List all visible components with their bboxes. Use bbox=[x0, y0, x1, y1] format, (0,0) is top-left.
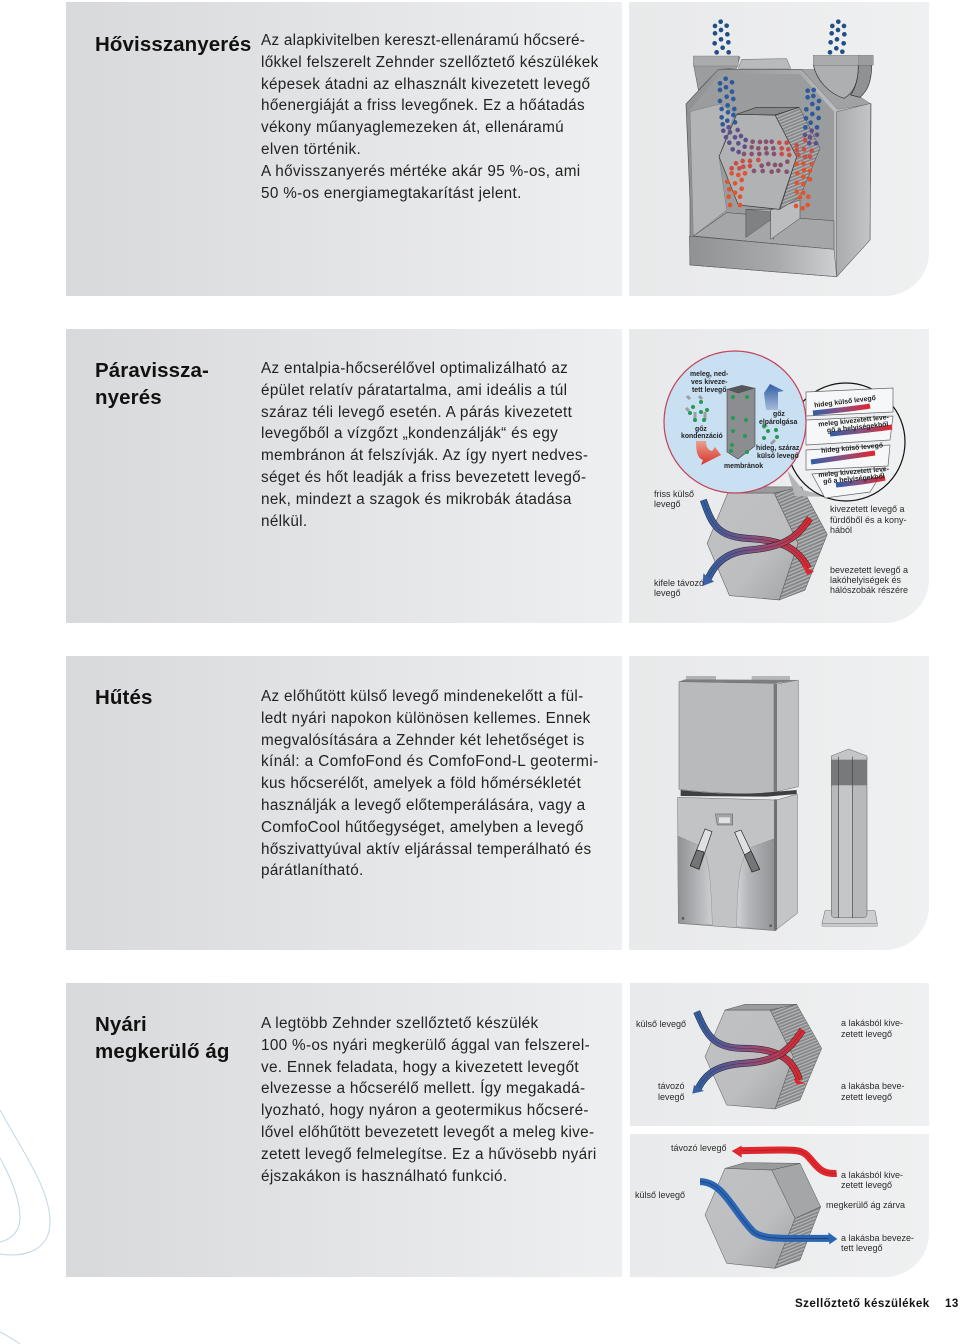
text block: hűtés leírása: ledt nyári napokon különösen kellemes. Ennek bbox=[261, 710, 591, 727]
heading: Páravisszanyerés: nyerés bbox=[95, 386, 162, 409]
magnifier: layers: gő a helyiségekből bbox=[823, 473, 885, 486]
footer: section title and page number: 13 bbox=[945, 1297, 959, 1310]
text block: hővisszanyerés leírása: hőenergiáját a friss levegőnek. Ez a hőátadás bbox=[261, 97, 585, 114]
labels: fürdőből és a kony- bbox=[830, 515, 907, 525]
magnifier: membrane circle bbox=[664, 351, 806, 493]
heading: Páravisszanyerés bbox=[95, 359, 209, 409]
illustration: ventilation unit and ground tube bbox=[677, 676, 878, 931]
text block: hővisszanyerés leírása: lőkkel felszerelt Zehnder szellőztető készülékek bbox=[261, 54, 599, 71]
labels: zetett levegő bbox=[841, 1180, 892, 1190]
magnifier: membrane circle: gőz bbox=[695, 426, 707, 433]
labels: a lakásból kive- bbox=[841, 1018, 903, 1028]
text block: hűtés leírása bbox=[261, 688, 599, 879]
text block: páravisszanyerés leírása: levegőből a vízgőzt „kondenzálják“ és egy bbox=[261, 425, 558, 442]
labels: a lakásba beveze- bbox=[841, 1233, 914, 1243]
text block: hővisszanyerés leírása: képesek átadni az elhasznált kivezetett levegő bbox=[261, 76, 590, 93]
magnifier: layers: hideg külső levegő bbox=[814, 395, 876, 409]
labels: kifele távozó bbox=[654, 578, 704, 588]
magnifier: membrane circle: elpárolgása bbox=[759, 419, 797, 426]
text block: páravisszanyerés leírása: Az entalpia-hőcserélővel optimalizálható az bbox=[261, 360, 568, 377]
labels: levegő bbox=[654, 499, 681, 509]
magnifier: layers: hideg külső levegő bbox=[821, 442, 883, 455]
panel: Nyári megkerülő ág bbox=[66, 983, 929, 1277]
magnifier: membrane circle: gőz bbox=[773, 411, 785, 418]
text block: hűtés leírása: ComfoCool hűtőegységet, amelyben a levegő bbox=[261, 819, 584, 836]
labels: kivezetett levegő a bbox=[830, 504, 905, 514]
right bottom background bbox=[630, 1134, 929, 1277]
heading: Páravisszanyerés: Páravissza- bbox=[95, 359, 209, 382]
exchanger hexagon bbox=[707, 487, 827, 600]
text block: nyári megkerülő leírása bbox=[261, 1015, 597, 1185]
heading: Hővisszanyerés: Hővisszanyerés bbox=[95, 33, 251, 56]
air dots: cold inner bbox=[720, 79, 819, 127]
labels: távozó bbox=[658, 1081, 685, 1091]
labels bbox=[654, 489, 908, 598]
magnifier: membrane circle: külső levegő bbox=[757, 453, 799, 460]
text block: hővisszanyerés leírása: A hővisszanyerés mértéke akár 95 %-os, ami bbox=[261, 163, 581, 180]
magnifier: layers bbox=[787, 383, 905, 501]
text block: hűtés leírása: párátlanítható. bbox=[261, 862, 364, 879]
magnifier: membrane circle: tett levegő bbox=[692, 387, 726, 394]
labels: lakóhelyiségek és bbox=[830, 575, 902, 585]
text block: páravisszanyerés leírása: membránon át felszívják. Az így nyert nedves- bbox=[261, 447, 588, 464]
heading: Nyári megkerülő ág: megkerülő ág bbox=[95, 1040, 230, 1063]
text block: páravisszanyerés leírása: nélkül. bbox=[261, 513, 307, 530]
magnifier: membrane circle: meleg, ned- bbox=[690, 371, 729, 378]
diagram: bypass open bbox=[692, 1004, 822, 1109]
text block: hűtés leírása: kus hőcserélőt, amelyek a föld hőmérsékletét bbox=[261, 775, 581, 792]
text block: nyári megkerülő leírása: ve. Ennek feladata, hogy a kivezetett levegőt bbox=[261, 1059, 579, 1076]
labels: hálószobák részére bbox=[830, 585, 908, 595]
text block: nyári megkerülő leírása: 100 %-os nyári megkerülő ággal van felszerel- bbox=[261, 1037, 590, 1054]
labels: távozó levegő bbox=[671, 1143, 727, 1153]
panel: Hűtés bbox=[66, 656, 929, 950]
text block: nyári megkerülő leírása: éjszakákon is használható funkció. bbox=[261, 1168, 507, 1185]
magnifier: layers: meleg kivezetett leve- bbox=[818, 414, 890, 428]
text block: nyári megkerülő leírása: lyozható, hogy nyáron a geotermikus hőcseré- bbox=[261, 1102, 589, 1119]
text block: hővisszanyerés leírása: vékony műanyaglemezeken át, ellenáramú bbox=[261, 119, 564, 136]
magnifier: layers: meleg kivezetett leve- bbox=[818, 466, 890, 479]
heading: Nyári megkerülő ág bbox=[95, 1013, 230, 1063]
text block: hővisszanyerés leírása: Az alapkivitelben kereszt-ellenáramú hőcseré- bbox=[261, 32, 585, 49]
text block: hűtés leírása: Az előhűtött külső levegő mindenekelőtt a fül- bbox=[261, 688, 584, 705]
footer: section title and page number: Szellőztető készülékek bbox=[795, 1297, 930, 1310]
decorative contour lines bbox=[0, 1110, 50, 1344]
labels: külső levegő bbox=[636, 1019, 686, 1029]
labels: tett levegő bbox=[841, 1243, 883, 1253]
labels: a lakásból kive- bbox=[841, 1170, 903, 1180]
connector wedge bbox=[787, 470, 830, 497]
heat exchanger hexagon bbox=[719, 107, 820, 209]
text block: nyári megkerülő leírása: zetett levegő felmelegítse. Ez a hűvösebb nyári bbox=[261, 1146, 597, 1163]
unit body bbox=[686, 55, 873, 277]
text block: hűtés leírása: megvalósítására a Zehnder két lehetőséget is bbox=[261, 732, 585, 749]
heading: Hűtés: Hűtés bbox=[95, 686, 152, 709]
arrows through exchanger bbox=[703, 500, 814, 586]
ground air intake tube bbox=[822, 749, 877, 926]
air dots: warm bbox=[727, 163, 812, 208]
text block: hővisszanyerés leírása bbox=[261, 32, 599, 202]
text block: hűtés leírása: kínál: a ComfoFond és ComfoFond-L geotermi- bbox=[261, 753, 599, 770]
text block: hővisszanyerés leírása: 50 %-os energiamegtakarítást jelent. bbox=[261, 185, 522, 202]
labels: levegő bbox=[654, 588, 681, 598]
lower unit bbox=[678, 790, 797, 931]
panel: Páravisszanyerés bbox=[66, 329, 929, 623]
illustration: heat recovery unit cutaway bbox=[686, 19, 874, 277]
text block: páravisszanyerés leírása: nek, mindezt a szagok és mikrobák átadása bbox=[261, 491, 572, 508]
illustration: bypass diagrams bbox=[635, 1004, 914, 1269]
magnifier: membrane circle: kondenzáció bbox=[681, 433, 723, 440]
panel: Hővisszanyerés bbox=[66, 2, 929, 296]
text block: hűtés leírása: használják a levegő előtemperálására, vagy a bbox=[261, 797, 585, 814]
heading: Nyári megkerülő ág: Nyári bbox=[95, 1013, 147, 1036]
illustration: enthalpy exchanger bbox=[654, 350, 908, 600]
text block: hűtés leírása: hőszivattyúval aktív eljárással temperálható és bbox=[261, 841, 591, 858]
text block: nyári megkerülő leírása: elvezesse a hőcserélő mellett. Így megakadá- bbox=[261, 1080, 585, 1097]
magnifier: membrane circle: hideg, száraz bbox=[756, 445, 800, 452]
text block: páravisszanyerés leírása bbox=[261, 360, 588, 530]
labels: levegő bbox=[658, 1092, 685, 1102]
text block: páravisszanyerés leírása: száraz téli levegő esetén. A párás kivezetett bbox=[261, 404, 572, 421]
upper unit bbox=[679, 676, 798, 794]
diagram: bypass closed bbox=[700, 1146, 837, 1268]
labels: a lakásba beve- bbox=[841, 1081, 905, 1091]
right top background bbox=[630, 983, 929, 1126]
air dots: warm transition bbox=[723, 127, 817, 152]
text block: nyári megkerülő leírása: lővel előhűtött bevezetett levegőt a meleg kive- bbox=[261, 1124, 594, 1141]
magnifier: layers: gő a helyiségekből bbox=[827, 421, 889, 435]
labels: hából bbox=[830, 525, 852, 535]
text block: nyári megkerülő leírása: A legtöbb Zehnder szellőztető készülék bbox=[261, 1015, 538, 1032]
magnifier: membrane circle: ves kiveze- bbox=[691, 379, 728, 386]
text block: páravisszanyerés leírása: séget és hőt leadják a friss bevezetett levegő- bbox=[261, 469, 586, 486]
magnifier: membrane circle: membránok bbox=[724, 463, 763, 470]
labels: friss külső bbox=[654, 489, 694, 499]
labels: megkerülő ág zárva bbox=[826, 1200, 905, 1210]
labels: külső levegő bbox=[635, 1190, 685, 1200]
labels bbox=[635, 1018, 914, 1253]
text block: páravisszanyerés leírása: épület relatív páratartalma, ami ideális a túl bbox=[261, 382, 567, 399]
air dots: cold bbox=[715, 22, 844, 52]
labels: zetett levegő bbox=[841, 1092, 892, 1102]
labels: zetett levegő bbox=[841, 1029, 892, 1039]
text block: hővisszanyerés leírása: elven történik. bbox=[261, 141, 361, 158]
labels: bevezetett levegő a bbox=[830, 565, 908, 575]
